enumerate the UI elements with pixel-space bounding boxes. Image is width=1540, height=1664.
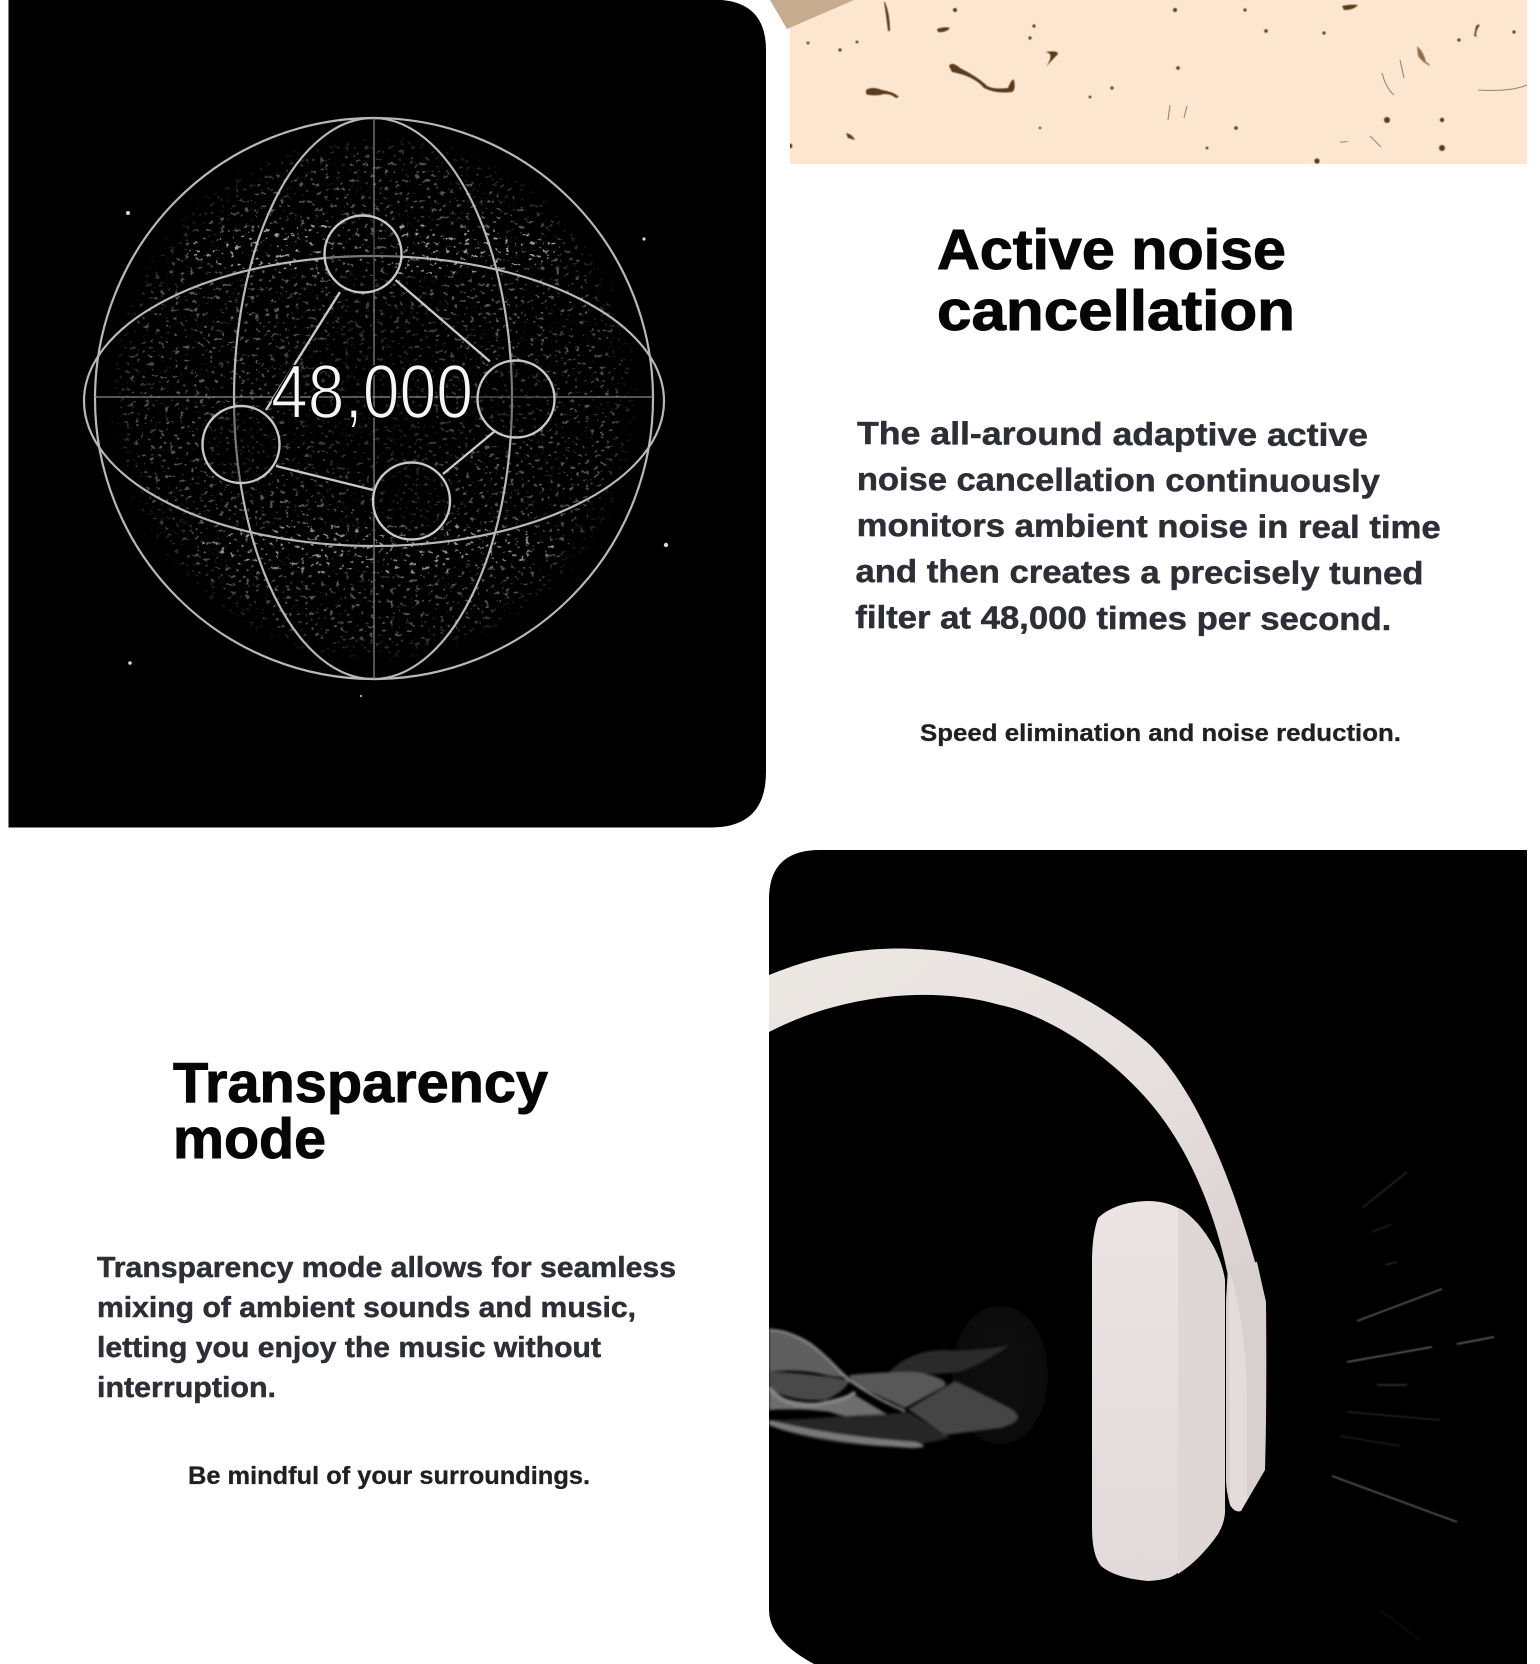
panel: beige textured surface	[770, 0, 1527, 164]
text block: active noise cancellation description: noise cancellation continuously	[857, 461, 1380, 499]
text block: active noise cancellation description: The all-around adaptive active	[857, 415, 1368, 453]
fine brown hair lines	[1168, 60, 1527, 147]
tan corner	[770, 0, 854, 29]
band lower yoke	[1226, 1262, 1266, 1511]
panel: headphones visual	[769, 849, 1527, 1664]
connected nodes	[202, 216, 554, 540]
text block: transparency mode description	[97, 1252, 676, 1404]
outgoing sound rays	[1332, 1172, 1494, 1640]
text block: active noise cancellation description: monitors ambient noise in real time	[857, 507, 1441, 545]
panel: black sphere visual	[8, 0, 766, 828]
panel background	[8, 0, 766, 828]
number: 48,000: 48,000	[271, 350, 473, 435]
sound wave smoke	[769, 1330, 1018, 1448]
caption: be mindful: Be mindful of your surroundings.	[188, 1462, 590, 1490]
heading: Transparency mode: Transparency	[173, 1051, 548, 1115]
text block: transparency mode description: letting you enjoy the music without	[97, 1332, 602, 1364]
ear cup outer shell	[1178, 1208, 1225, 1574]
text block: active noise cancellation description	[855, 415, 1441, 637]
text block: transparency mode description: interruption.	[97, 1372, 276, 1404]
text block: transparency mode description: Transparency mode allows for seamless	[97, 1252, 676, 1284]
headband	[769, 948, 1266, 1302]
stray stars	[126, 211, 668, 697]
particle dust inside the sphere	[109, 133, 639, 663]
heading: Active noise cancellation: Active noise	[937, 218, 1286, 282]
caption: speed elimination: Speed elimination and noise reduction.	[920, 720, 1401, 747]
dust haze beside the smoke	[952, 1305, 1048, 1445]
text block: active noise cancellation description: filter at 48,000 times per second.	[855, 599, 1391, 637]
heading: Active noise cancellation: cancellation	[937, 279, 1295, 343]
text block: transparency mode description: mixing of ambient sounds and music,	[97, 1292, 636, 1324]
beige surface	[790, 0, 1527, 164]
heading: Transparency mode	[173, 1051, 548, 1171]
heading: Active noise cancellation	[937, 218, 1295, 343]
brown specks	[788, 2, 1516, 164]
heading: Transparency mode: mode	[173, 1107, 326, 1171]
ear cup	[1092, 1201, 1225, 1581]
text block: active noise cancellation description: and then creates a precisely tuned	[855, 553, 1424, 591]
sphere wireframe	[84, 118, 664, 679]
panel background	[769, 849, 1527, 1664]
